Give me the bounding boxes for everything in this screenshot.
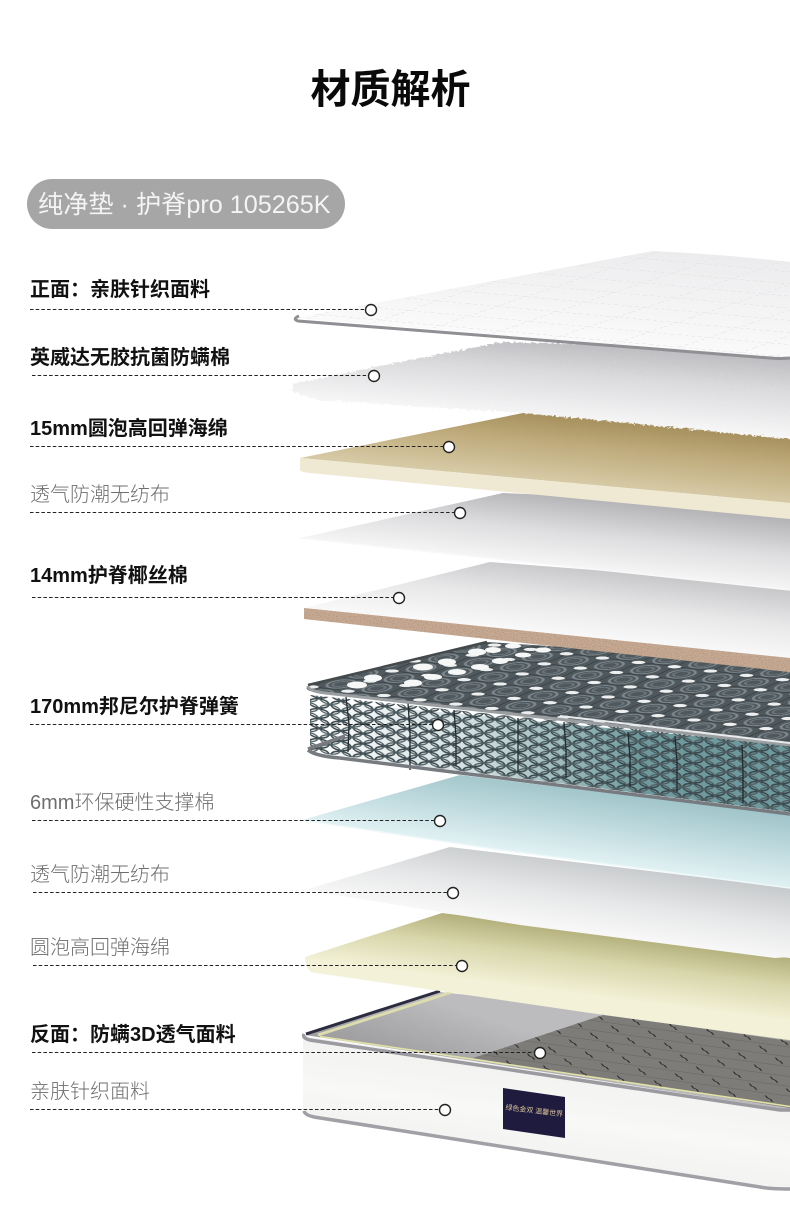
model pill badge — [27, 179, 345, 229]
large openings at back left — [347, 644, 551, 688]
layer: lower non-woven — [305, 847, 790, 958]
label: anti-mite fleece — [30, 345, 380, 382]
mattress interior surface — [305, 992, 790, 1110]
brand label — [503, 1088, 565, 1138]
lower frame — [308, 736, 790, 814]
spring support wires — [346, 697, 743, 803]
spring sides — [310, 700, 790, 812]
model pill badge: 纯净垫 · 护脊pro 105265K — [38, 191, 331, 219]
layer: pocket spring unit — [306, 642, 790, 814]
label: 6mm support foam: 6mm环保硬性支撑棉 — [30, 791, 214, 814]
label: bottom foam — [30, 936, 468, 972]
label: top knit fabric: 正面：亲肤针织面料 — [30, 278, 210, 301]
label: 14mm coir — [30, 564, 404, 604]
layer: anti-mite fleece — [292, 342, 790, 441]
spring top surface — [306, 642, 790, 743]
label: skin-friendly knit side: 亲肤针织面料 — [30, 1080, 150, 1103]
mattress side panel — [303, 1036, 790, 1190]
label: reverse 3D fabric — [30, 1023, 546, 1058]
label: 6mm support foam — [30, 791, 446, 826]
layer: 15mm foam — [300, 413, 790, 519]
title: 材质解析 — [310, 68, 470, 112]
label: 14mm coir: 14mm护脊椰丝棉 — [30, 564, 188, 587]
layer: upper non-woven — [300, 493, 790, 590]
layer: top knit fabric — [295, 251, 790, 358]
label: bottom foam: 圆泡高回弹海绵 — [30, 936, 170, 959]
label: anti-mite fleece: 英威达无胶抗菌防螨棉 — [30, 345, 230, 369]
label: 15mm foam: 15mm圆泡高回弹海绵 — [30, 416, 228, 440]
label: top knit fabric — [30, 278, 376, 316]
label: 15mm foam — [30, 416, 454, 452]
label: lower non-woven — [30, 863, 458, 898]
label: reverse 3D fabric: 反面：防螨3D透气面料 — [30, 1023, 236, 1046]
label: skin-friendly knit side — [30, 1080, 450, 1116]
layer: base mattress with 3D reverse fabric — [303, 991, 790, 1190]
label: 170mm springs — [30, 694, 444, 730]
label: upper non-woven: 透气防潮无纺布 — [30, 483, 170, 506]
upper frame — [308, 642, 487, 685]
label: upper non-woven — [30, 483, 466, 518]
layer: 14mm coir board — [304, 562, 790, 672]
brand label: 绿色金双 温馨世界 — [505, 1103, 564, 1119]
layer: bottom foam — [305, 913, 790, 1041]
label: 170mm springs: 170mm邦尼尔护脊弹簧 — [30, 694, 239, 718]
quilted 3D fabric — [473, 1015, 790, 1108]
layer: blue support foam — [302, 775, 790, 888]
label: lower non-woven: 透气防潮无纺布 — [30, 863, 170, 886]
